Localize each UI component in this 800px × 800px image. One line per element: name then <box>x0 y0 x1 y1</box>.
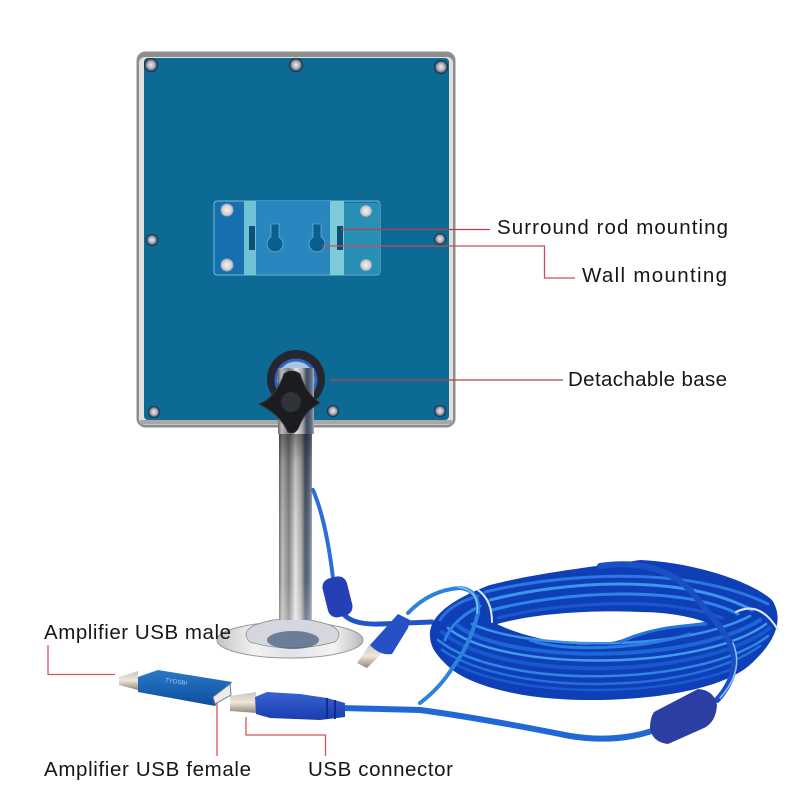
cable: usb connector to ferrite <box>340 708 660 739</box>
label: wall mounting: Wall mounting <box>582 264 727 287</box>
leader line: wall mounting <box>322 246 575 278</box>
cable: outer coil strand <box>408 564 737 703</box>
cable coil <box>430 560 778 700</box>
amplifier dongle: TYOSBI <box>165 678 188 687</box>
label: detachable base: Detachable base <box>568 368 727 391</box>
leader line: detachable base <box>330 379 563 381</box>
label: surround rod mounting: Surround rod mounting <box>497 216 728 239</box>
stand: pole <box>279 424 312 620</box>
bracket: wall and rod mount <box>214 201 380 275</box>
panel: antenna back plate <box>136 52 456 428</box>
leader line: amplifier usb female <box>216 703 218 756</box>
cable: from stand to coil <box>313 490 432 624</box>
ferrite: stand cable <box>321 574 354 619</box>
usb plug: hanging connector <box>357 614 410 668</box>
knob: detachable base joint <box>259 350 325 434</box>
stand: round base <box>217 618 363 658</box>
screws around plate <box>144 58 448 418</box>
label: amplifier usb female: Amplifier USB female <box>44 758 251 781</box>
ferrite: coil cable <box>650 689 717 744</box>
label: amplifier usb male: Amplifier USB male <box>44 621 231 644</box>
leader line: usb connector <box>246 717 326 756</box>
usb connector plug <box>230 692 345 720</box>
leader line: surround rod mounting <box>341 228 490 230</box>
label: usb connector: USB connector <box>308 758 453 781</box>
amplifier dongle <box>119 670 232 706</box>
leader line: amplifier usb male <box>48 645 115 674</box>
